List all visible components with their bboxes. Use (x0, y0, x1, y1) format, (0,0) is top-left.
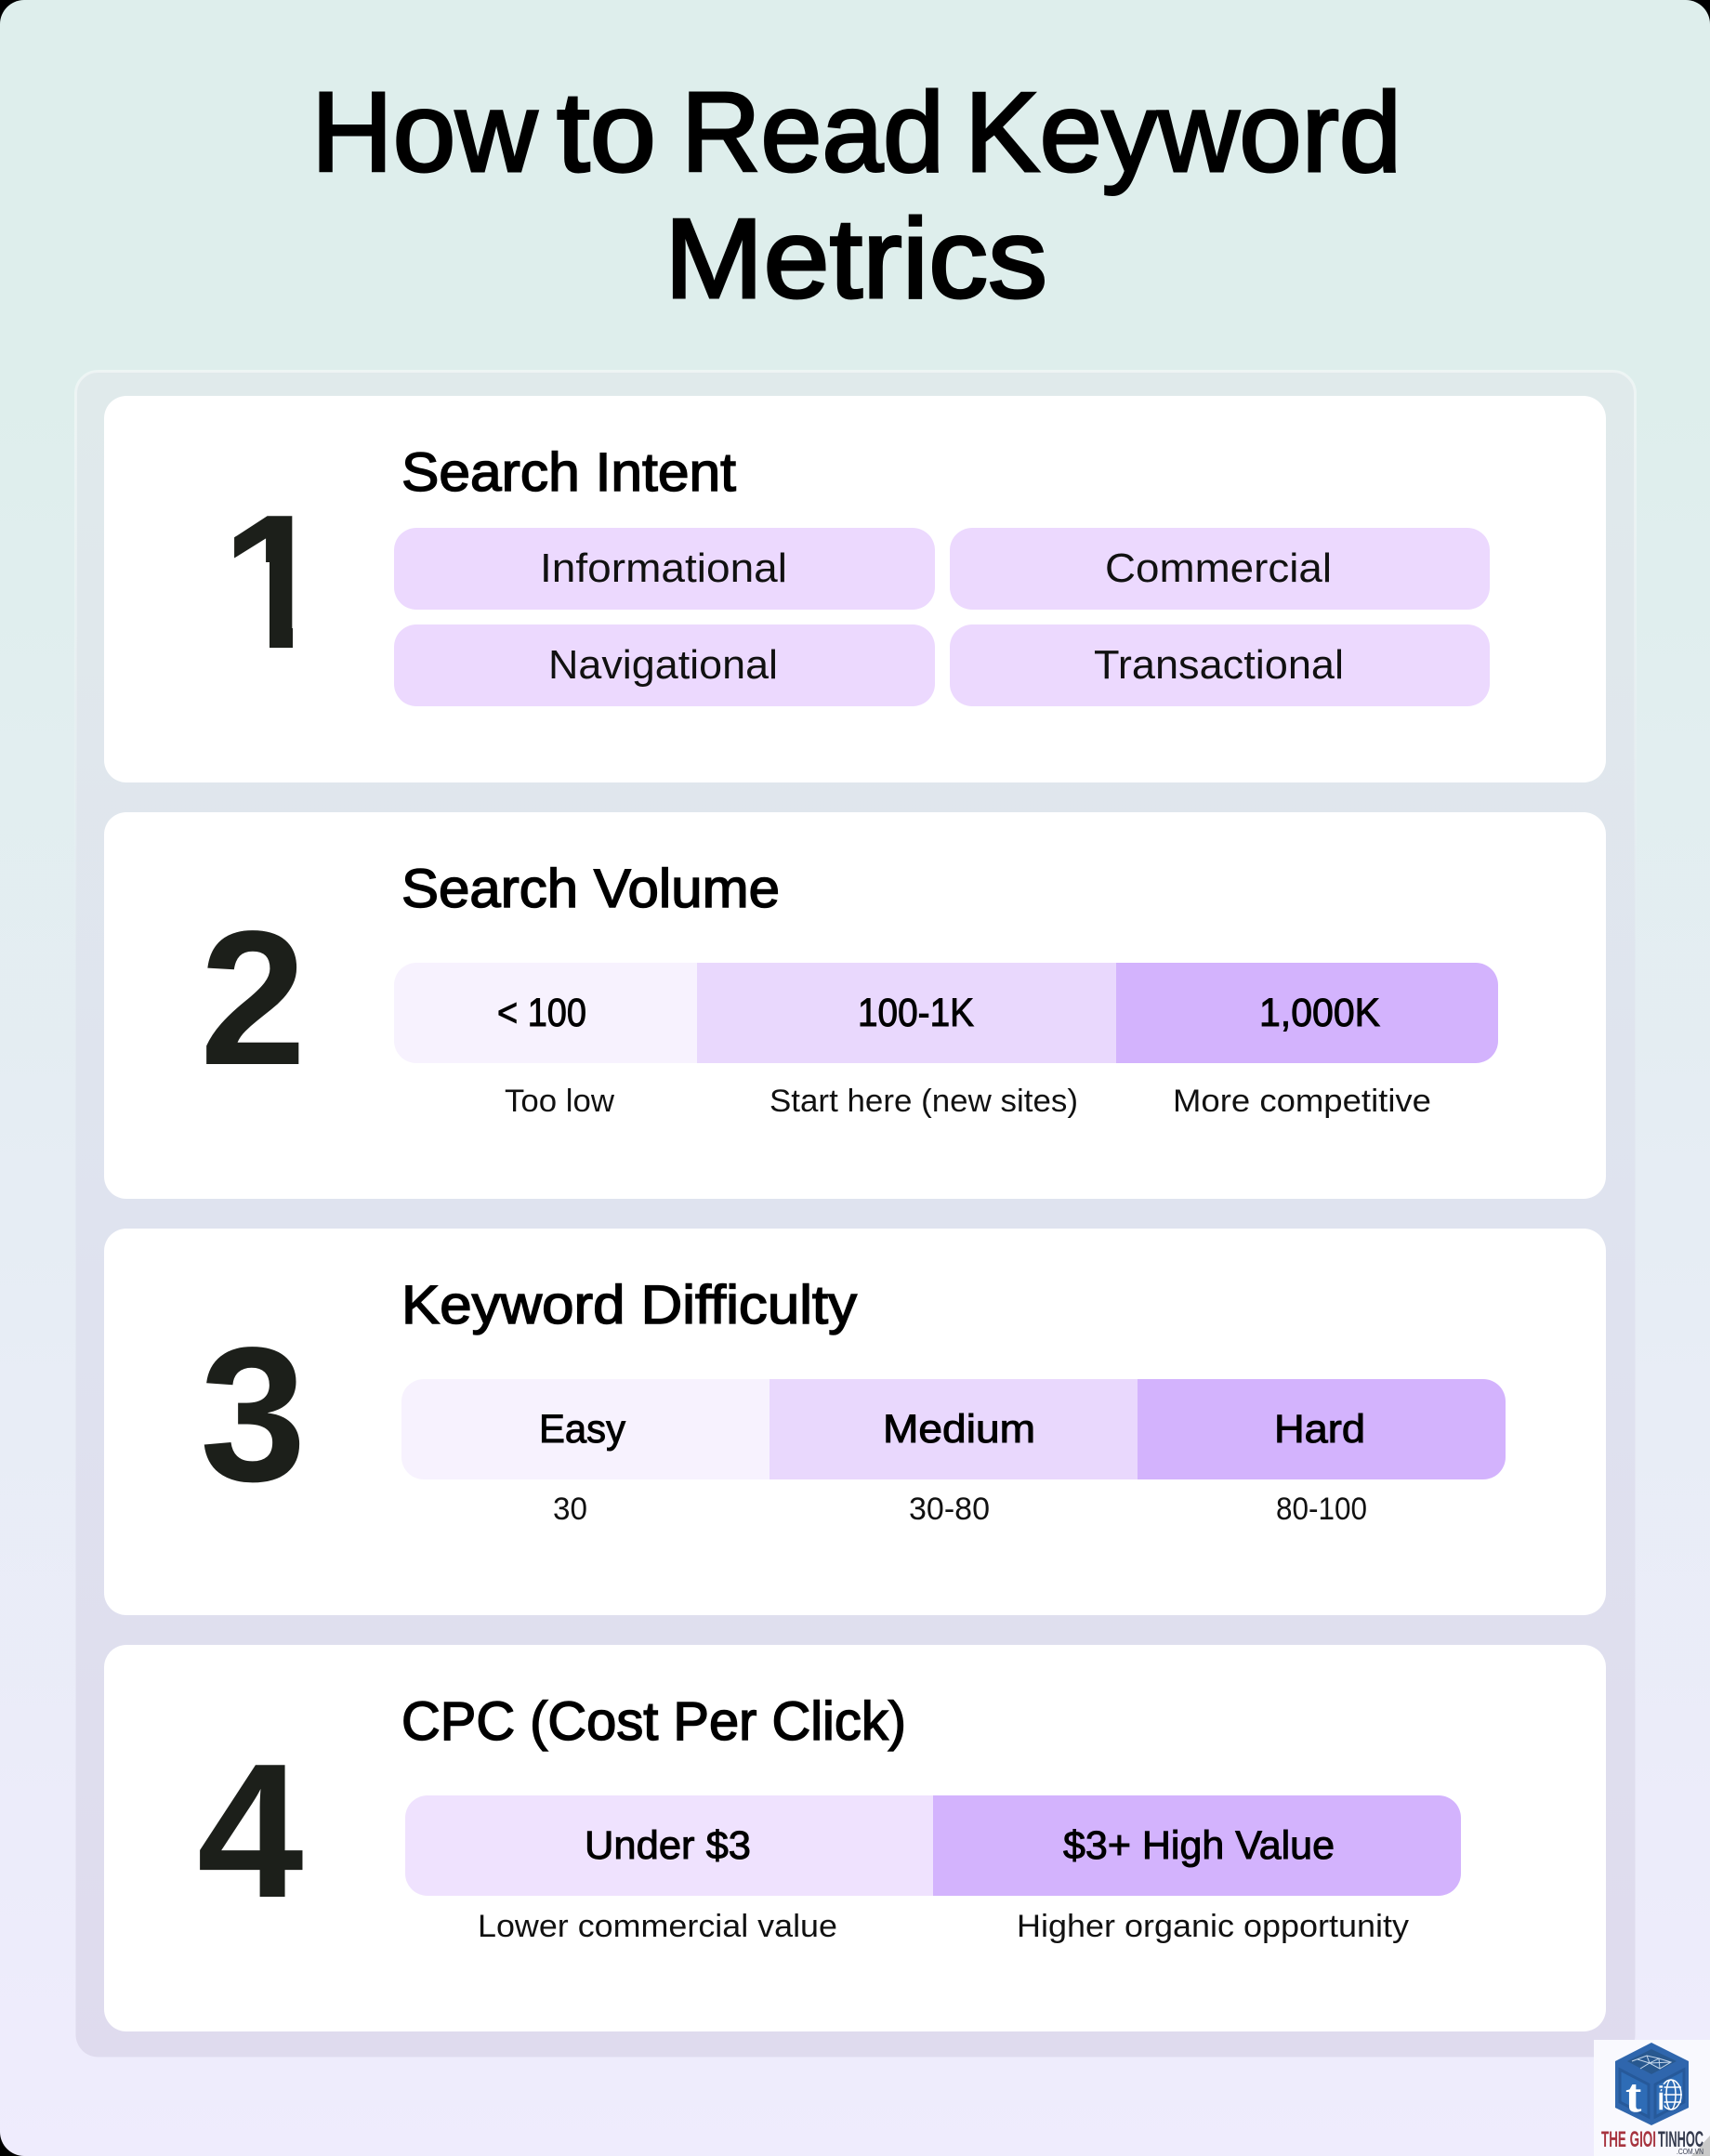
number 3: 3 (200, 1308, 307, 1521)
panel: metrics container (76, 372, 1636, 2057)
bar labels: volume: < 100 (497, 991, 586, 1035)
pill: commercial (950, 528, 1490, 610)
scale bar: volume (394, 963, 1498, 1063)
watermark logo (1594, 2040, 1710, 2156)
logo wordmark: THE GIOI (1601, 2127, 1656, 2152)
bar labels: volume (497, 991, 1380, 1035)
heading: keyword difficulty: Keyword Difficulty (401, 1275, 857, 1335)
title: How (311, 69, 538, 195)
title: to (557, 69, 656, 195)
watermark corner fold (1691, 2136, 1710, 2156)
title: Metrics (664, 195, 1047, 322)
bar labels: volume: 100-1K (858, 991, 974, 1035)
captions: cpc (478, 1909, 1409, 1944)
bar labels: cpc: Under $3 (585, 1823, 751, 1868)
pill: informational: Informational (540, 546, 787, 591)
panel: card 1 search intent (104, 396, 1606, 782)
pill: transactional (950, 624, 1490, 706)
number 2: 2 (200, 891, 307, 1105)
pill: transactional: Transactional (1094, 642, 1344, 688)
captions: difficulty (553, 1492, 1367, 1527)
captions: cpc: Higher organic opportunity (1017, 1909, 1409, 1944)
title (311, 69, 1401, 322)
captions: cpc: Lower commercial value (478, 1909, 837, 1944)
captions: difficulty: 30-80 (909, 1492, 990, 1527)
heading: cpc: CPC (Cost Per Click) (401, 1691, 906, 1752)
panel: card 2 search volume (104, 812, 1606, 1199)
logo wordmark: .COM.VN (1677, 2148, 1703, 2156)
heading: search volume: Search Volume (401, 859, 780, 919)
pill: informational (394, 528, 935, 610)
icon: blue cube: i (1656, 2080, 1666, 2119)
number 1: 1 (221, 475, 328, 689)
captions: volume: Start here (new sites) (770, 1084, 1078, 1119)
icon: blue cube: t (1625, 2070, 1642, 2123)
panel: card 3 keyword difficulty (104, 1229, 1606, 1615)
captions: difficulty: 80-100 (1276, 1492, 1367, 1527)
title: Keyword (965, 69, 1401, 195)
number 4: 4 (197, 1724, 304, 1938)
bar labels: cpc (585, 1823, 1335, 1868)
bar labels: difficulty: Medium (883, 1407, 1035, 1452)
panel: card 4 cpc (104, 1645, 1606, 2031)
captions: volume (505, 1084, 1431, 1119)
bar labels: difficulty: Hard (1274, 1407, 1365, 1452)
scale bar: difficulty (401, 1379, 1506, 1479)
bar labels: difficulty (539, 1407, 1365, 1452)
bar labels: cpc: $3+ High Value (1063, 1823, 1335, 1868)
heading: search intent: Search Intent (401, 442, 736, 503)
title: Read (681, 69, 944, 195)
pill: navigational (394, 624, 935, 706)
captions: volume: Too low (505, 1084, 614, 1119)
captions: difficulty: 30 (553, 1492, 587, 1527)
pill: navigational: Navigational (548, 642, 778, 688)
pill: commercial: Commercial (1105, 546, 1332, 591)
bar labels: volume: 1,000K (1259, 991, 1380, 1035)
icon: blue cube (1615, 2043, 1689, 2125)
captions: volume: More competitive (1173, 1084, 1431, 1119)
bar labels: difficulty: Easy (539, 1407, 625, 1452)
scale bar: cpc (405, 1795, 1461, 1896)
